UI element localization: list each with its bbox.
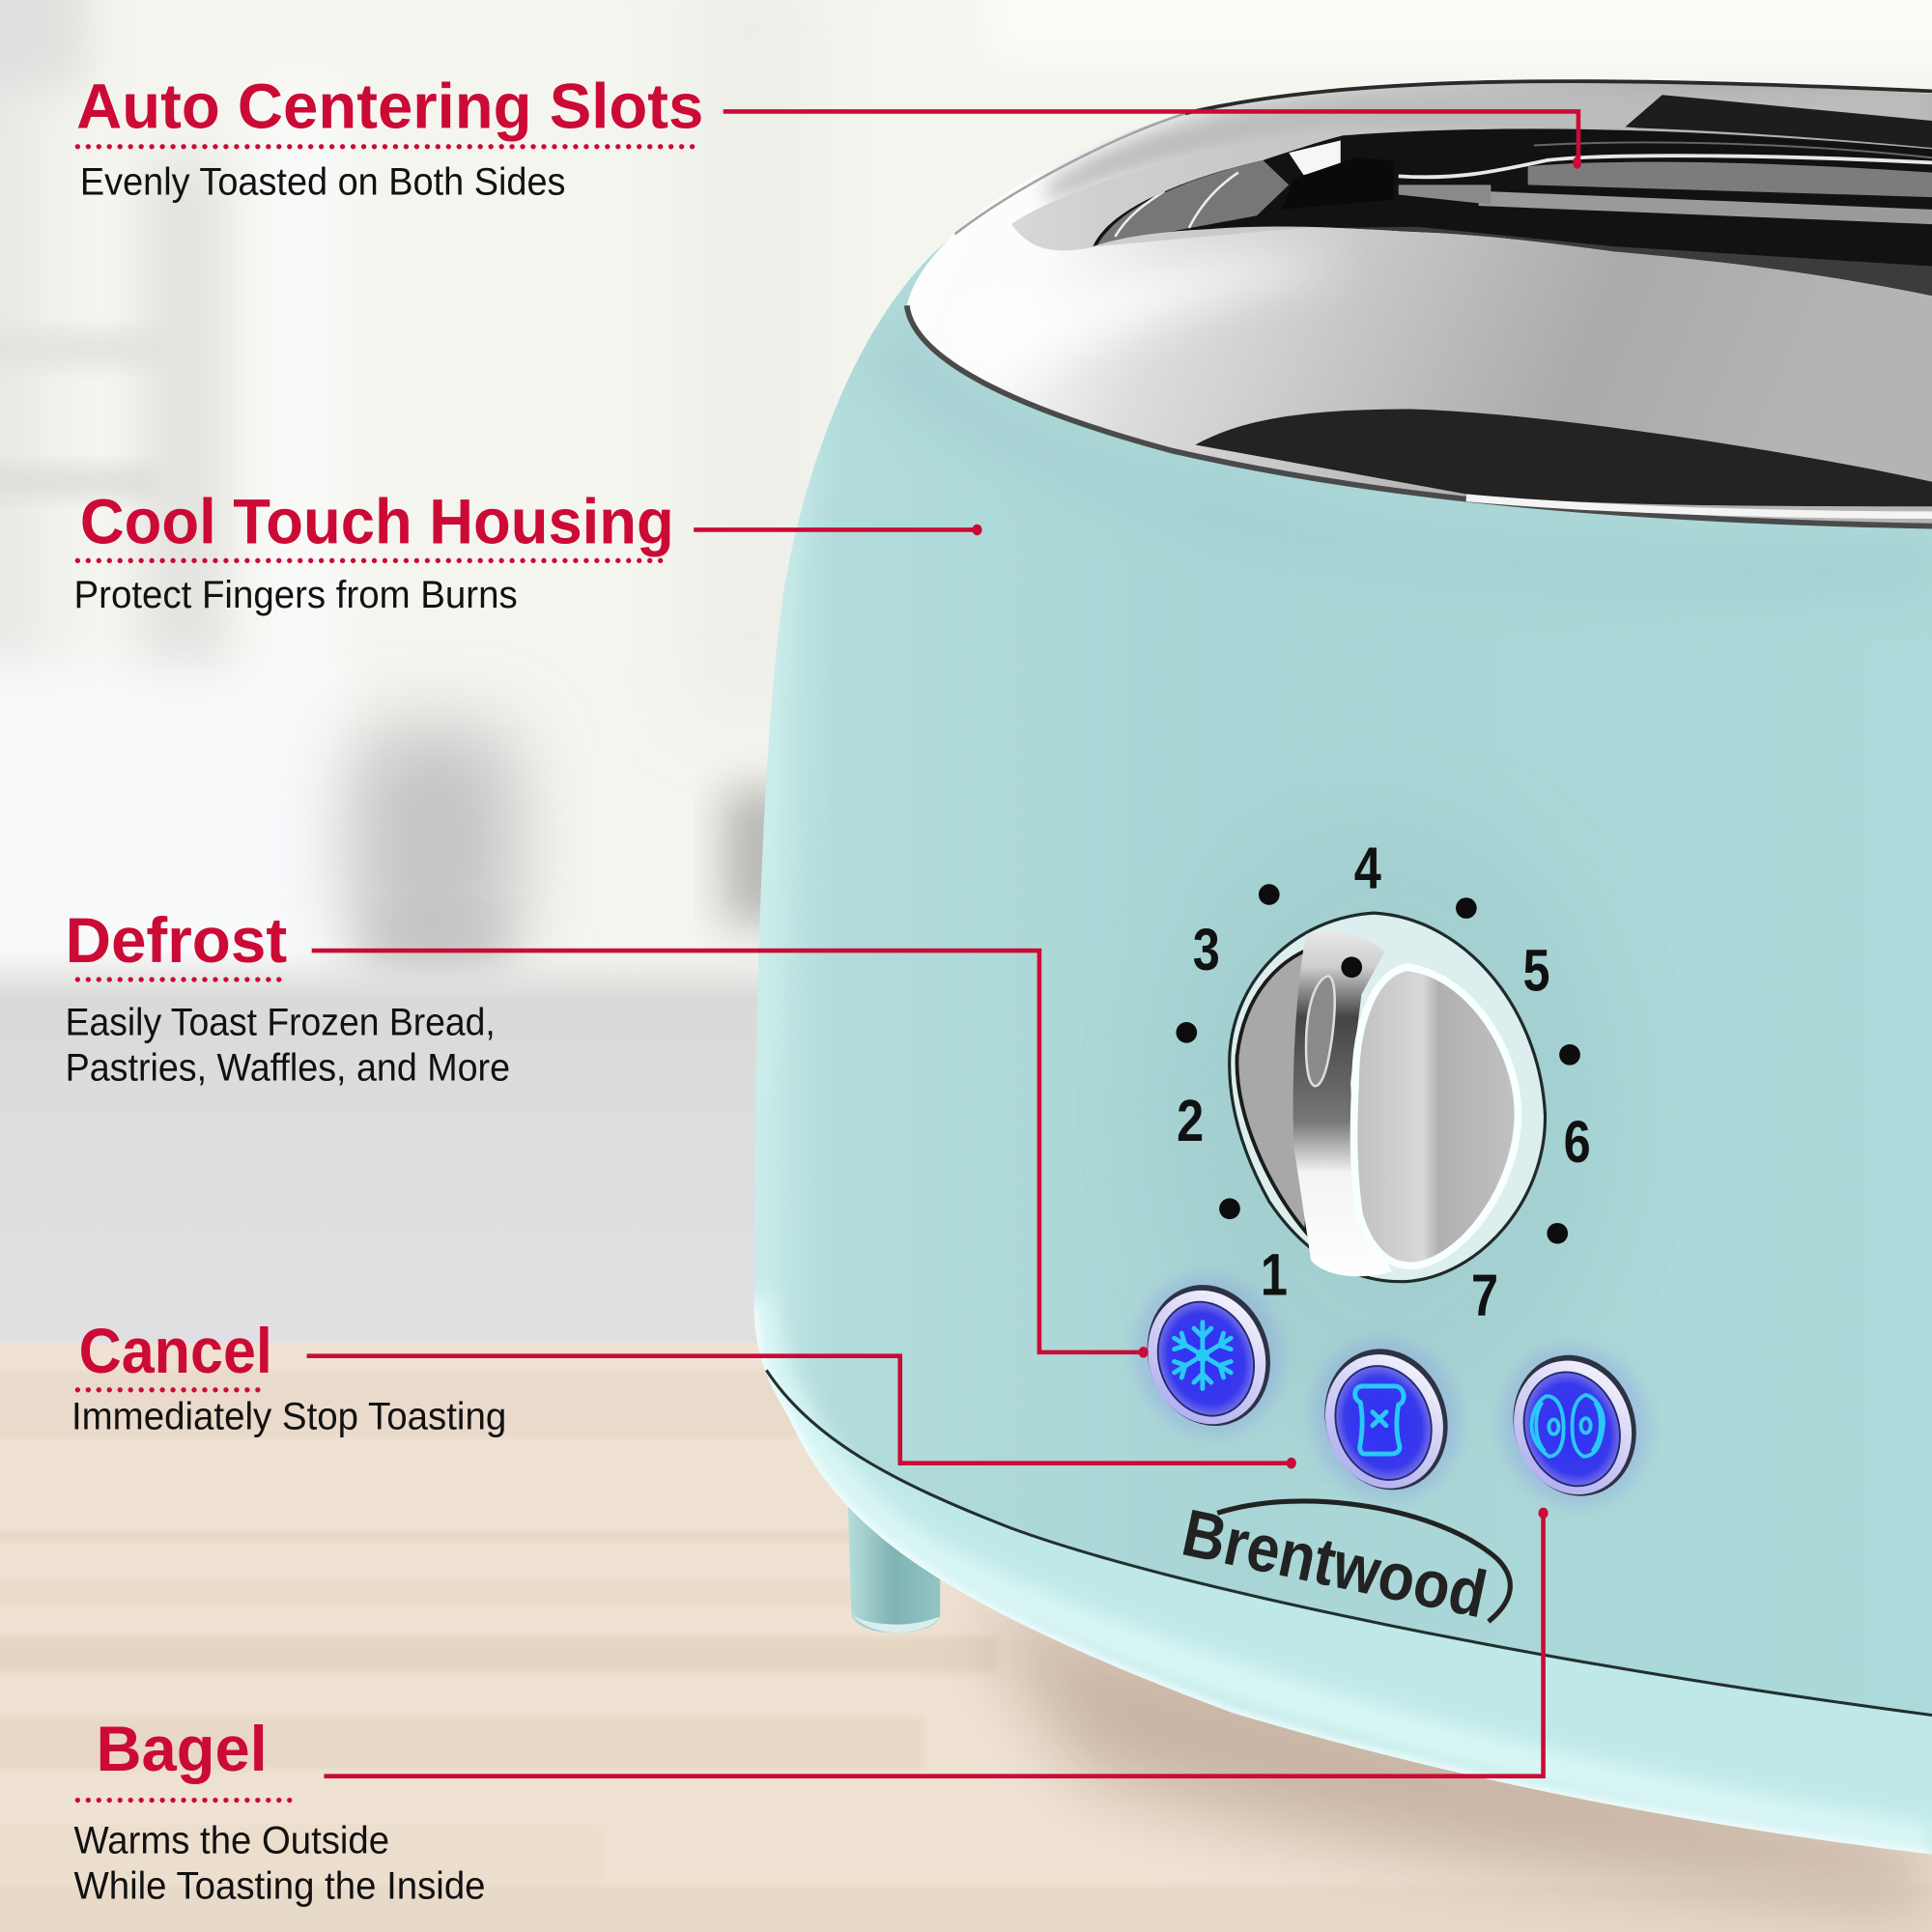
upper chrome shading bbox=[936, 86, 1932, 370]
knob outer ring bbox=[1230, 913, 1546, 1282]
dial numbers bbox=[1177, 836, 1591, 1328]
knob right face bbox=[1353, 967, 1518, 1265]
ridge slot bbox=[1306, 976, 1335, 1086]
knob ridge chrome bbox=[1293, 931, 1392, 1276]
seam line bbox=[766, 1370, 1932, 1716]
dial numbers: 6 bbox=[1564, 1109, 1591, 1175]
callout text: bagel: While Toasting the Inside bbox=[74, 1865, 486, 1908]
temperature dial bbox=[1176, 836, 1591, 1328]
button: cancel bbox=[1291, 1320, 1482, 1520]
callout text: bagel bbox=[74, 1714, 486, 1908]
dial numbers: 5 bbox=[1523, 938, 1550, 1004]
callout text: auto centering slots: Evenly Toasted on Both Sides bbox=[80, 161, 565, 204]
callout text: cancel: Cancel bbox=[79, 1316, 272, 1387]
body shading bbox=[739, 124, 1932, 1922]
callout text: auto centering slots bbox=[76, 71, 703, 204]
icon: bagel halves bbox=[1531, 1395, 1604, 1457]
callout text: bagel: Bagel bbox=[96, 1714, 268, 1785]
dial indicator dot bbox=[1341, 956, 1362, 978]
callout text: cool touch housing: Cool Touch Housing bbox=[80, 486, 674, 557]
icon: snowflake bbox=[1175, 1322, 1231, 1389]
toaster shadow on floor bbox=[974, 1602, 1932, 1910]
callout text: auto centering slots: Auto Centering Slots bbox=[76, 71, 703, 143]
slot interior bbox=[1084, 124, 1932, 308]
dial numbers: 2 bbox=[1177, 1088, 1204, 1153]
callout leader: bagel bbox=[324, 1508, 1548, 1776]
top edge bbox=[955, 113, 1185, 234]
chrome surface bbox=[907, 82, 1932, 524]
top edge dark bbox=[1185, 81, 1932, 113]
dial numbers: 3 bbox=[1193, 917, 1220, 982]
callout text: defrost bbox=[66, 905, 510, 1090]
callout text: defrost: Defrost bbox=[66, 905, 287, 977]
dial dots bbox=[1176, 884, 1580, 1244]
callout text: defrost: Easily Toast Frozen Bread, bbox=[66, 1001, 496, 1043]
slot recess bbox=[1011, 126, 1932, 250]
callout text: cool touch housing bbox=[74, 487, 674, 616]
icon: bread with x bbox=[1355, 1386, 1404, 1454]
floor: wood planks bbox=[0, 1343, 1932, 1932]
chrome top and slots bbox=[907, 81, 1932, 526]
toaster body bbox=[753, 238, 1932, 1855]
dial numbers: 1 bbox=[1261, 1242, 1288, 1308]
lower rim bbox=[907, 305, 1932, 526]
callout text: cancel: Immediately Stop Toasting bbox=[71, 1396, 506, 1438]
dial numbers: 7 bbox=[1471, 1263, 1498, 1328]
upper dark reflection bbox=[1625, 95, 1932, 153]
rim highlight bbox=[1466, 497, 1932, 515]
toaster foot bbox=[848, 1497, 940, 1633]
callout text: cool touch housing: Protect Fingers from Burns bbox=[74, 574, 518, 616]
background: blurred kitchen bbox=[0, 0, 1932, 1368]
callout leader: cancel bbox=[307, 1356, 1296, 1468]
button: defrost bbox=[1113, 1255, 1304, 1456]
brand logo: Brentwood: Brentwood bbox=[1177, 1495, 1492, 1632]
callout leader: cool touch housing bbox=[694, 525, 982, 535]
callout text: cancel bbox=[71, 1316, 506, 1438]
callout text: bagel: Warms the Outside bbox=[74, 1819, 389, 1861]
button: bagel bbox=[1479, 1325, 1670, 1525]
callout leader: defrost bbox=[312, 951, 1149, 1358]
knob left face bbox=[1236, 944, 1324, 1233]
callout text: defrost: Pastries, Waffles, and More bbox=[66, 1047, 510, 1090]
dial numbers: 4 bbox=[1354, 836, 1381, 901]
lower dark reflection bbox=[1195, 409, 1932, 506]
callout leader: auto centering slots bbox=[724, 111, 1581, 169]
